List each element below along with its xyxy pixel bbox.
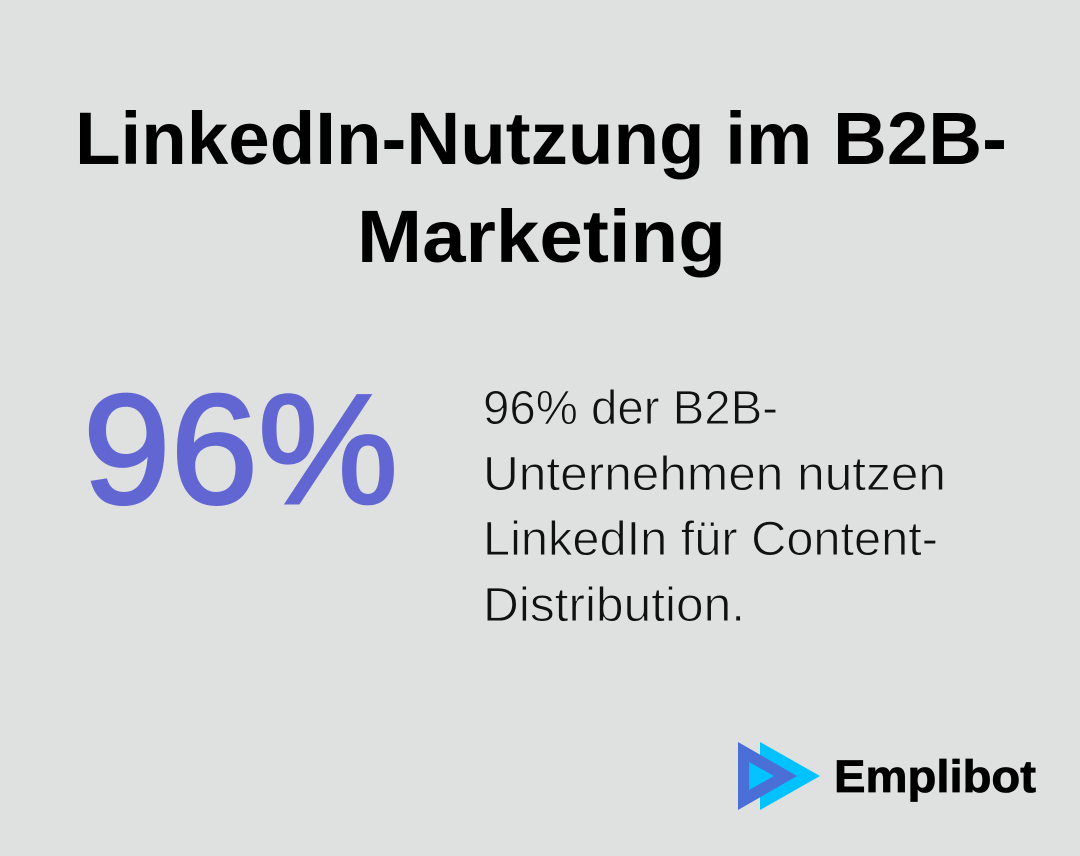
big statistic: 96%: 96% [83, 363, 398, 537]
description text [483, 382, 946, 632]
logo: Emplibot [738, 742, 1036, 810]
description text: LinkedIn für Content- [483, 513, 938, 566]
description text: Distribution. [483, 579, 745, 632]
description text: Unternehmen nutzen [483, 448, 946, 501]
description text: 96% der B2B- [483, 382, 778, 435]
icon: play triangles [738, 742, 820, 810]
wordmark: Emplibot [834, 751, 1036, 802]
title [75, 97, 1007, 278]
title: Marketing [357, 195, 726, 278]
title: LinkedIn-Nutzung im B2B- [75, 97, 1007, 180]
